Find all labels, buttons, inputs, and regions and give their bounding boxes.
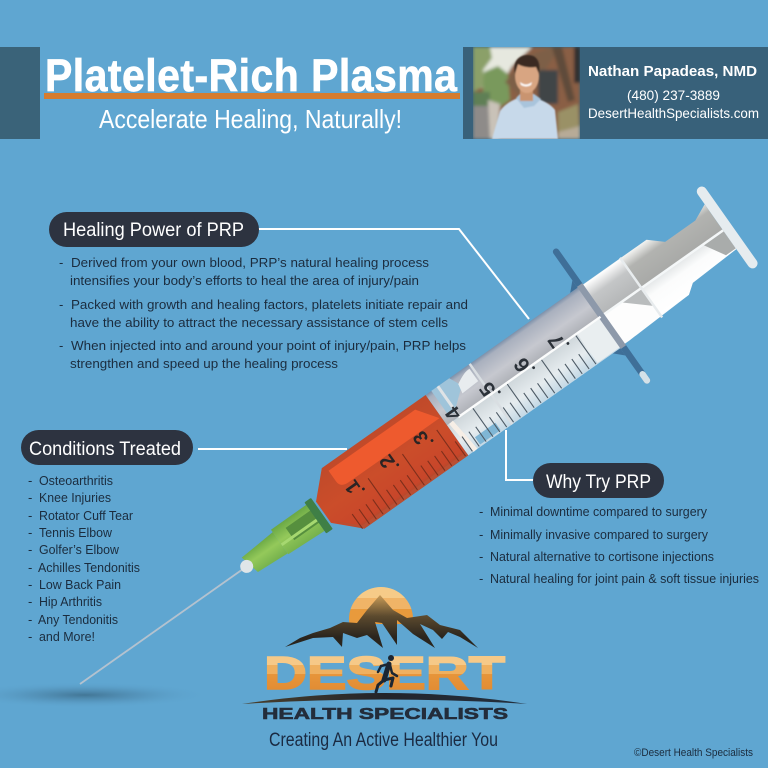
conditions list: Knee Injuries [39, 490, 111, 505]
shirt [492, 98, 558, 139]
reasons list [479, 504, 759, 586]
syringe illustration [33, 158, 768, 751]
conditions list: Any Tendonitis [38, 612, 118, 627]
conditions list: Osteoarthritis [39, 473, 113, 488]
heading pill: Healing Power of PRP [63, 220, 244, 241]
callout line: why try [506, 430, 534, 480]
reasons list: Minimally invasive compared to surgery [490, 527, 708, 542]
logo sun [349, 587, 413, 624]
title underline [44, 93, 460, 99]
red section numbers: 2 [375, 450, 400, 472]
logo tagline: Creating An Active Healthier You [269, 730, 498, 751]
heading pill: Why Try PRP [546, 472, 651, 493]
needle hub [230, 498, 333, 586]
reasons list: - [479, 571, 483, 586]
conditions list: - [28, 542, 32, 557]
contact panel [463, 47, 768, 139]
red section numbers [340, 426, 434, 497]
logo runner [376, 655, 397, 692]
benefits text: intensifies your body’s efforts to heal the area of injury/pain [70, 273, 419, 288]
panel: conditions treated [21, 430, 193, 644]
barrel numbers: 6 [510, 353, 535, 376]
red section numbers: 3 [409, 426, 433, 448]
red section numbers: 1 [341, 476, 365, 497]
logo wordmark: DESERT [264, 647, 505, 699]
conditions list: - [28, 629, 32, 644]
barrel center line [458, 317, 601, 417]
logo mountains [285, 595, 478, 648]
phone: (480) 237-3889 [627, 87, 720, 103]
barrel flange overlap [577, 283, 626, 349]
ground shadow [0, 682, 210, 708]
conditions list: Hip Arthritis [39, 594, 102, 609]
heading pill [49, 212, 259, 247]
benefits text: have the ability to attract the necessary assistance of stem cells [70, 315, 449, 330]
portrait photo [473, 47, 580, 139]
conditions list: and More! [39, 629, 95, 644]
benefits text [59, 255, 468, 371]
subtitle: Accelerate Healing, Naturally! [99, 104, 402, 134]
clear barrel tip [431, 375, 472, 416]
callout line: conditions [198, 448, 347, 450]
conditions list: - [28, 560, 32, 575]
barrel numbers: 4 [441, 401, 466, 424]
website: DesertHealthSpecialists.com [588, 105, 759, 121]
benefits text: - [59, 297, 63, 312]
conditions list: - [28, 473, 32, 488]
pale barrel end [577, 318, 620, 363]
reasons list: - [479, 504, 483, 519]
logo: desert health specialists [242, 587, 527, 751]
conditions list: - [28, 594, 32, 609]
conditions list: - [28, 525, 32, 540]
benefits text: Packed with growth and healing factors, platelets initiate repair and [71, 297, 468, 312]
needle [79, 566, 246, 685]
conditions list: Achilles Tendonitis [38, 560, 140, 575]
heading pill [21, 430, 193, 465]
benefits text: When injected into and around your point of injury/pain, PRP helps [71, 338, 467, 353]
reasons list: - [479, 549, 483, 564]
panel: healing power of PRP [49, 212, 468, 371]
reasons list: - [479, 527, 483, 542]
conditions list: Golfer’s Elbow [39, 542, 120, 557]
barrel numbers: 5 [475, 377, 501, 400]
conditions list [28, 473, 140, 644]
neck and face [520, 88, 533, 101]
logo health specialists: HEALTH SPECIALISTS [262, 706, 508, 723]
benefits text: Derived from your own blood, PRP’s natural healing process [71, 255, 430, 270]
reasons list: Natural alternative to cortisone injections [490, 549, 714, 564]
red blood fill [302, 395, 468, 542]
heading pill [533, 463, 664, 498]
benefits text: - [59, 255, 63, 270]
conditions list: Tennis Elbow [39, 525, 113, 540]
reasons list: Minimal downtime compared to surgery [490, 504, 707, 519]
heading pill: Conditions Treated [29, 439, 181, 460]
conditions list: - [28, 577, 32, 592]
title: Platelet-Rich Plasma [45, 51, 458, 101]
copyright: ©Desert Health Specialists [634, 747, 753, 759]
plunger thumb rest [695, 185, 760, 270]
conditions list: - [28, 508, 32, 523]
barrel upper half [426, 287, 601, 425]
conditions list: Low Back Pain [39, 577, 121, 592]
barrel lower half [447, 317, 622, 455]
conditions list: Rotator Cuff Tear [39, 508, 134, 523]
finger flange [544, 247, 651, 390]
logo ground arc [242, 693, 527, 704]
barrel numbers [441, 329, 569, 424]
red section ticks [341, 425, 466, 529]
panel: why try PRP [479, 463, 759, 586]
conditions list: - [28, 612, 32, 627]
callout line: healing power [258, 229, 529, 319]
barrel scale ticks [452, 335, 596, 451]
barrel numbers: 7 [544, 329, 569, 352]
reasons list: Natural healing for joint pain & soft tissue injuries [490, 571, 759, 586]
doctor name: Nathan Papadeas, NMD [588, 63, 757, 80]
header: left accent block [0, 47, 40, 139]
benefits text: strengthen and speed up the healing process [70, 356, 339, 371]
conditions list: - [28, 490, 32, 505]
benefits text: - [59, 338, 63, 353]
plunger [575, 185, 760, 355]
